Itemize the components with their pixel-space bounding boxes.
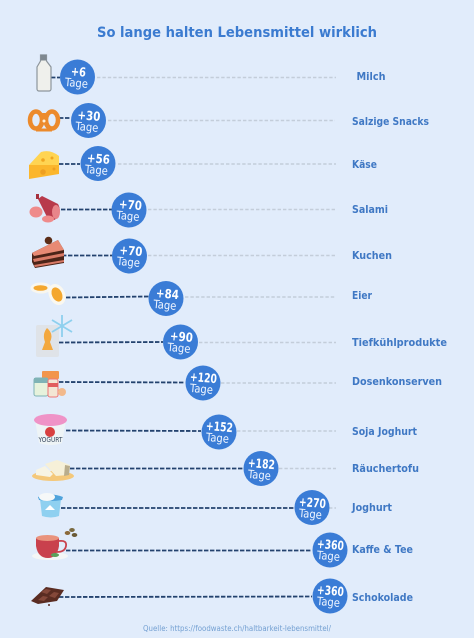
badge: +84 Tage: +84 — [155, 285, 180, 302]
label: Tiefkühlprodukte: Tiefkühlprodukte — [352, 337, 447, 349]
badge: +6 Tage: Tage — [64, 75, 89, 91]
icon: chocolate bar — [31, 587, 64, 606]
badge: +6 Tage — [60, 60, 95, 94]
label: Schokolade: Schokolade — [352, 592, 413, 604]
row: Schokolade — [31, 578, 413, 614]
icon: pretzel — [30, 112, 58, 130]
icon: cake slice — [32, 237, 64, 268]
row: Salami — [30, 192, 388, 228]
badge: +120 Tage: Tage — [189, 381, 214, 397]
row: Tiefkühlprodukte — [36, 315, 447, 360]
badge: +120 Tage — [186, 366, 220, 400]
icon: tea cup and coffee beans — [32, 528, 77, 560]
badge: +360 Tage: +360 — [316, 582, 345, 599]
badge: +360 Tage — [312, 578, 348, 614]
badge: +56 Tage: +56 — [86, 150, 111, 167]
badge: +84 Tage — [148, 281, 184, 316]
badge: +182 Tage: Tage — [247, 467, 272, 483]
row: Milch — [37, 54, 386, 94]
label: Käse: Käse — [352, 159, 377, 171]
badge: +360 Tage: Tage — [316, 594, 341, 610]
icon: halved eggs — [30, 281, 69, 308]
badge: +30 Tage: Tage — [74, 119, 99, 135]
badge: +152 Tage: +152 — [205, 418, 234, 435]
label: Räuchertofu: Räuchertofu — [352, 463, 419, 475]
badge: +270 Tage — [294, 490, 330, 525]
badge: +30 Tage — [71, 103, 106, 138]
label: Kaffe & Tee: Kaffe & Tee — [352, 544, 413, 556]
badge: +70 Tage — [112, 238, 147, 274]
source note: Quelle: https://foodwaste.ch/haltbarkeit-lebensmittel/ — [143, 624, 331, 633]
row: Salzige Snacks — [30, 103, 429, 138]
badge: +360 Tage — [312, 532, 348, 568]
badge: +56 Tage — [80, 146, 116, 181]
badge: +270 Tage: +270 — [298, 494, 327, 511]
badge: +70 Tage: +70 — [119, 242, 143, 259]
badge: +270 Tage: Tage — [298, 506, 323, 522]
label: Joghurt: Joghurt — [351, 502, 392, 514]
badge: +70 Tage: Tage — [116, 254, 141, 270]
row: Soja Joghurt — [34, 414, 417, 450]
badge: +30 Tage: +30 — [77, 107, 101, 124]
badge: +152 Tage — [202, 414, 236, 450]
label: Soja Joghurt: Soja Joghurt — [352, 426, 417, 438]
row: Eier — [30, 281, 373, 316]
badge: +360 Tage: +360 — [316, 536, 345, 553]
row: Kuchen — [32, 237, 392, 274]
icon: yogurt pot — [38, 493, 63, 518]
row: Joghurt — [38, 490, 392, 525]
badge: +120 Tage: +120 — [189, 369, 218, 386]
badge: +90 Tage: +90 — [169, 328, 194, 345]
badge: +90 Tage: Tage — [166, 340, 191, 356]
badge: +6 Tage: +6 — [70, 63, 87, 80]
label: Milch: Milch — [356, 71, 386, 83]
label: Dosenkonserven: Dosenkonserven — [352, 376, 442, 388]
badge: +56 Tage: Tage — [84, 162, 109, 178]
title: So lange halten Lebensmittel wirklich — [97, 25, 377, 41]
icon: salami — [30, 194, 60, 222]
badge: +70 Tage — [112, 192, 146, 228]
badge: +360 Tage: Tage — [316, 548, 341, 564]
badge: +182 Tage — [244, 451, 278, 486]
badge: +70 Tage: +70 — [118, 196, 143, 213]
label: Eier: Eier — [352, 290, 373, 302]
icon: preserve jars — [34, 371, 66, 397]
row: Kaffe & Tee — [32, 528, 413, 568]
row: Räuchertofu — [32, 451, 419, 486]
label: Salami: Salami — [352, 204, 388, 216]
badge: +90 Tage — [163, 324, 198, 360]
label: Salzige Snacks: Salzige Snacks — [352, 116, 429, 128]
row: Dosenkonserven — [34, 366, 442, 400]
icon: soy yogurt cup: YOGURT — [38, 436, 63, 444]
badge: +84 Tage: Tage — [152, 297, 177, 313]
icon: milk bottle — [37, 54, 51, 91]
row: Käse — [29, 146, 377, 181]
icon: cheese wedge — [29, 151, 59, 179]
label: Kuchen: Kuchen — [352, 250, 392, 262]
badge: +70 Tage: Tage — [115, 208, 140, 224]
icon: soy yogurt cup — [34, 414, 67, 445]
icon: frozen fish and snowflake — [36, 315, 72, 357]
badge: +182 Tage: +182 — [247, 455, 276, 472]
badge: +152 Tage: Tage — [205, 430, 230, 446]
icon: smoked tofu — [32, 460, 74, 481]
